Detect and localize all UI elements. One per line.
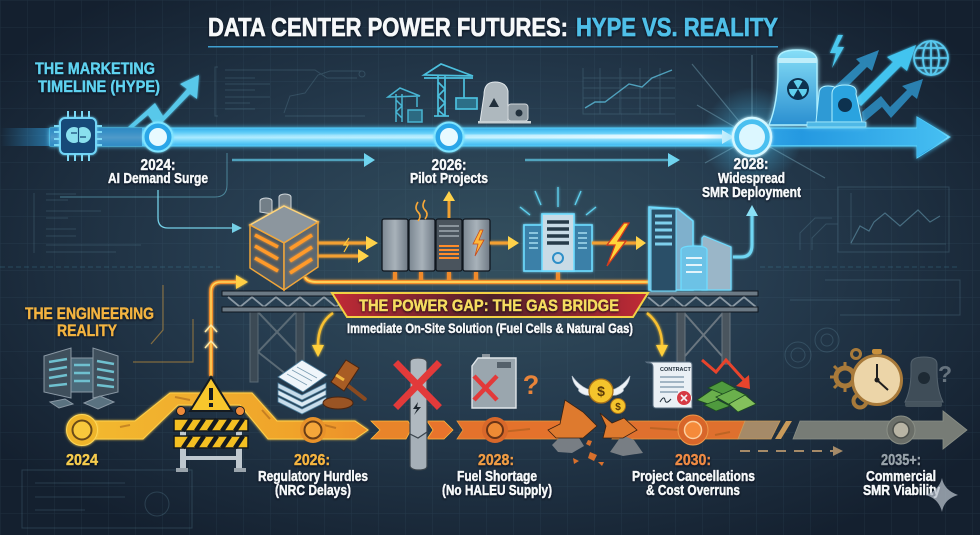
node: 2028 hype starburst <box>692 55 825 187</box>
label: 2026 regulatory hurdles: Regulatory Hurdles <box>258 469 368 485</box>
reality heading: THE ENGINEERING <box>25 304 154 323</box>
banner: power gap: THE POWER GAP: THE GAS BRIDGE <box>359 296 619 315</box>
chart: hype line <box>585 70 672 108</box>
icon: lightning <box>830 35 844 68</box>
icon: small crane <box>388 88 422 122</box>
icon: data center buildings <box>649 207 731 291</box>
icon: orange question mark: ? <box>523 370 539 400</box>
icon: lightning bolt <box>607 223 629 266</box>
node: 2035 reality <box>887 416 915 444</box>
label: 2024 AI demand surge <box>108 157 208 187</box>
band piece after pipe <box>427 421 453 439</box>
arrow: hype thin 1 <box>232 153 375 167</box>
icon: fuel cell block <box>250 194 318 290</box>
arrow: gap to contracts <box>647 313 668 357</box>
label: 2028 fuel shortage: Fuel Shortage <box>457 469 537 485</box>
icon: red falling arrow <box>702 360 750 389</box>
label: 2035 commercial SMR: 2035+: <box>881 452 921 469</box>
arrow: server to data center <box>592 236 646 250</box>
band grey arrow <box>793 411 967 449</box>
icon: rubble chunks <box>548 400 643 466</box>
band main orange segment <box>457 421 575 439</box>
label: 2028 fuel shortage <box>442 452 552 499</box>
arrow: dashed future <box>740 446 843 456</box>
label: 2035 commercial SMR <box>863 452 940 499</box>
label: 2028 SMR deployment: SMR Deployment <box>702 185 801 201</box>
icon: power racks <box>382 219 490 271</box>
arrow: power bus <box>305 272 665 282</box>
label: 2035 commercial SMR: Commercial <box>866 469 936 485</box>
hype heading: THE MARKETING <box>35 59 155 78</box>
bridge legs left <box>250 312 304 382</box>
icon: winged coin: $ <box>597 383 605 399</box>
icon: winged coin <box>572 376 630 414</box>
arrow: fuel cell to racks <box>318 236 378 263</box>
node: 2024 reality <box>66 414 98 446</box>
label: 2026 pilot projects: Pilot Projects <box>410 171 488 187</box>
icon: AI chip <box>54 111 102 161</box>
label: 2028 SMR deployment: 2028: <box>734 156 768 173</box>
icon: cash pile <box>697 381 756 412</box>
title: HYPE VS. REALITY <box>576 12 778 42</box>
label: 2028 SMR deployment: Widespread <box>718 171 785 187</box>
icon: winged coin: $ <box>615 402 621 413</box>
label: 2028 fuel shortage: (No HALEU Supply) <box>442 483 552 499</box>
node: 2024 hype <box>144 122 172 152</box>
reality heading <box>25 304 154 340</box>
arrow: racks up <box>443 191 455 218</box>
icon: SMR reactors <box>769 50 866 127</box>
label: 2024 reality: 2024 <box>66 452 98 469</box>
label: 2026 pilot projects: 2026: <box>432 157 466 174</box>
icon: barricade <box>174 406 248 472</box>
panel: gas bridge <box>222 291 758 382</box>
node: 2026 reality <box>300 417 326 443</box>
band yellow segment <box>82 393 368 439</box>
band slash <box>775 421 792 439</box>
chart: reality line <box>851 210 940 243</box>
marketing timeline arrow <box>0 117 950 158</box>
reality heading: REALITY <box>57 321 118 340</box>
label: 2024 AI demand surge: 2024: <box>140 157 176 174</box>
label: 2030 cancellations: 2030: <box>675 452 711 469</box>
hype heading: TIMELINE (HYPE) <box>38 77 160 96</box>
icon: dark reactor with question <box>905 357 952 407</box>
label: 2026 regulatory hurdles: (NRC Delays) <box>275 483 351 499</box>
growth arrow <box>128 75 199 128</box>
rust spots <box>120 397 730 435</box>
label: 2030 cancellations: & Cost Overruns <box>646 483 740 499</box>
label: 2035 commercial SMR: SMR Viability <box>863 483 940 499</box>
arrow: hype thin 2 <box>525 153 680 167</box>
hype heading <box>35 59 160 96</box>
label: 2026 pilot projects <box>410 157 488 187</box>
label: 2028 fuel shortage: 2028: <box>478 452 514 469</box>
node: 2028 reality <box>482 417 508 443</box>
icon: warning triangle <box>190 377 232 411</box>
label: immediate on-site solution: Immediate On-Site Solution (Fuel Cells & Natural Gas) <box>347 321 633 336</box>
band after rubble <box>612 421 745 439</box>
amber circuit <box>133 285 193 362</box>
icon: sparkle <box>926 478 958 512</box>
label: 2024 AI demand surge: AI Demand Surge <box>108 171 208 187</box>
label: 2030 cancellations: Project Cancellations <box>632 469 755 485</box>
icon: large crane <box>424 64 477 116</box>
icon: open server racks <box>44 348 118 409</box>
bridge legs right <box>677 312 730 364</box>
truss <box>222 291 758 312</box>
icon: jerrycan with X <box>472 354 516 408</box>
icon: globe <box>914 41 948 75</box>
arrow: rising 1 <box>833 50 879 95</box>
icon: dark reactor with question: ? <box>938 361 952 387</box>
reality timeline <box>82 393 967 449</box>
arrow: data center up to SMR <box>733 205 758 257</box>
node: 2026 hype <box>434 122 464 152</box>
node: 2030 reality <box>678 415 708 445</box>
band tan piece <box>738 421 780 439</box>
icon: stopwatch <box>852 349 902 404</box>
icon: grey pilot reactors <box>478 82 531 124</box>
arrow: feed to gas bridge <box>60 153 242 233</box>
icon: cracked pipe with X <box>398 358 437 470</box>
arrow: power feed up and into fuel cell <box>205 275 248 376</box>
icon: document stack <box>278 360 327 414</box>
icon: gears <box>830 350 866 408</box>
icon: gavel <box>323 360 368 409</box>
arrow: gap to regulatory <box>312 313 333 357</box>
title: DATA CENTER POWER FUTURES: <box>208 12 568 42</box>
arrow: rising zigzag <box>862 79 923 123</box>
title <box>208 12 778 48</box>
band broken pieces <box>371 421 412 439</box>
icon: heat waves <box>416 200 427 221</box>
label: 2026 regulatory hurdles <box>258 452 368 499</box>
label: 2026 regulatory hurdles: 2026: <box>294 452 330 469</box>
icon: contract: CONTRACT <box>660 367 691 373</box>
label: 2028 SMR deployment <box>702 156 801 201</box>
icon: contract <box>646 362 692 408</box>
arrow: racks to server <box>490 236 519 250</box>
arrow: rising 2 <box>855 45 916 106</box>
icon: glowing server <box>520 187 596 271</box>
label: 2030 cancellations <box>632 452 755 499</box>
